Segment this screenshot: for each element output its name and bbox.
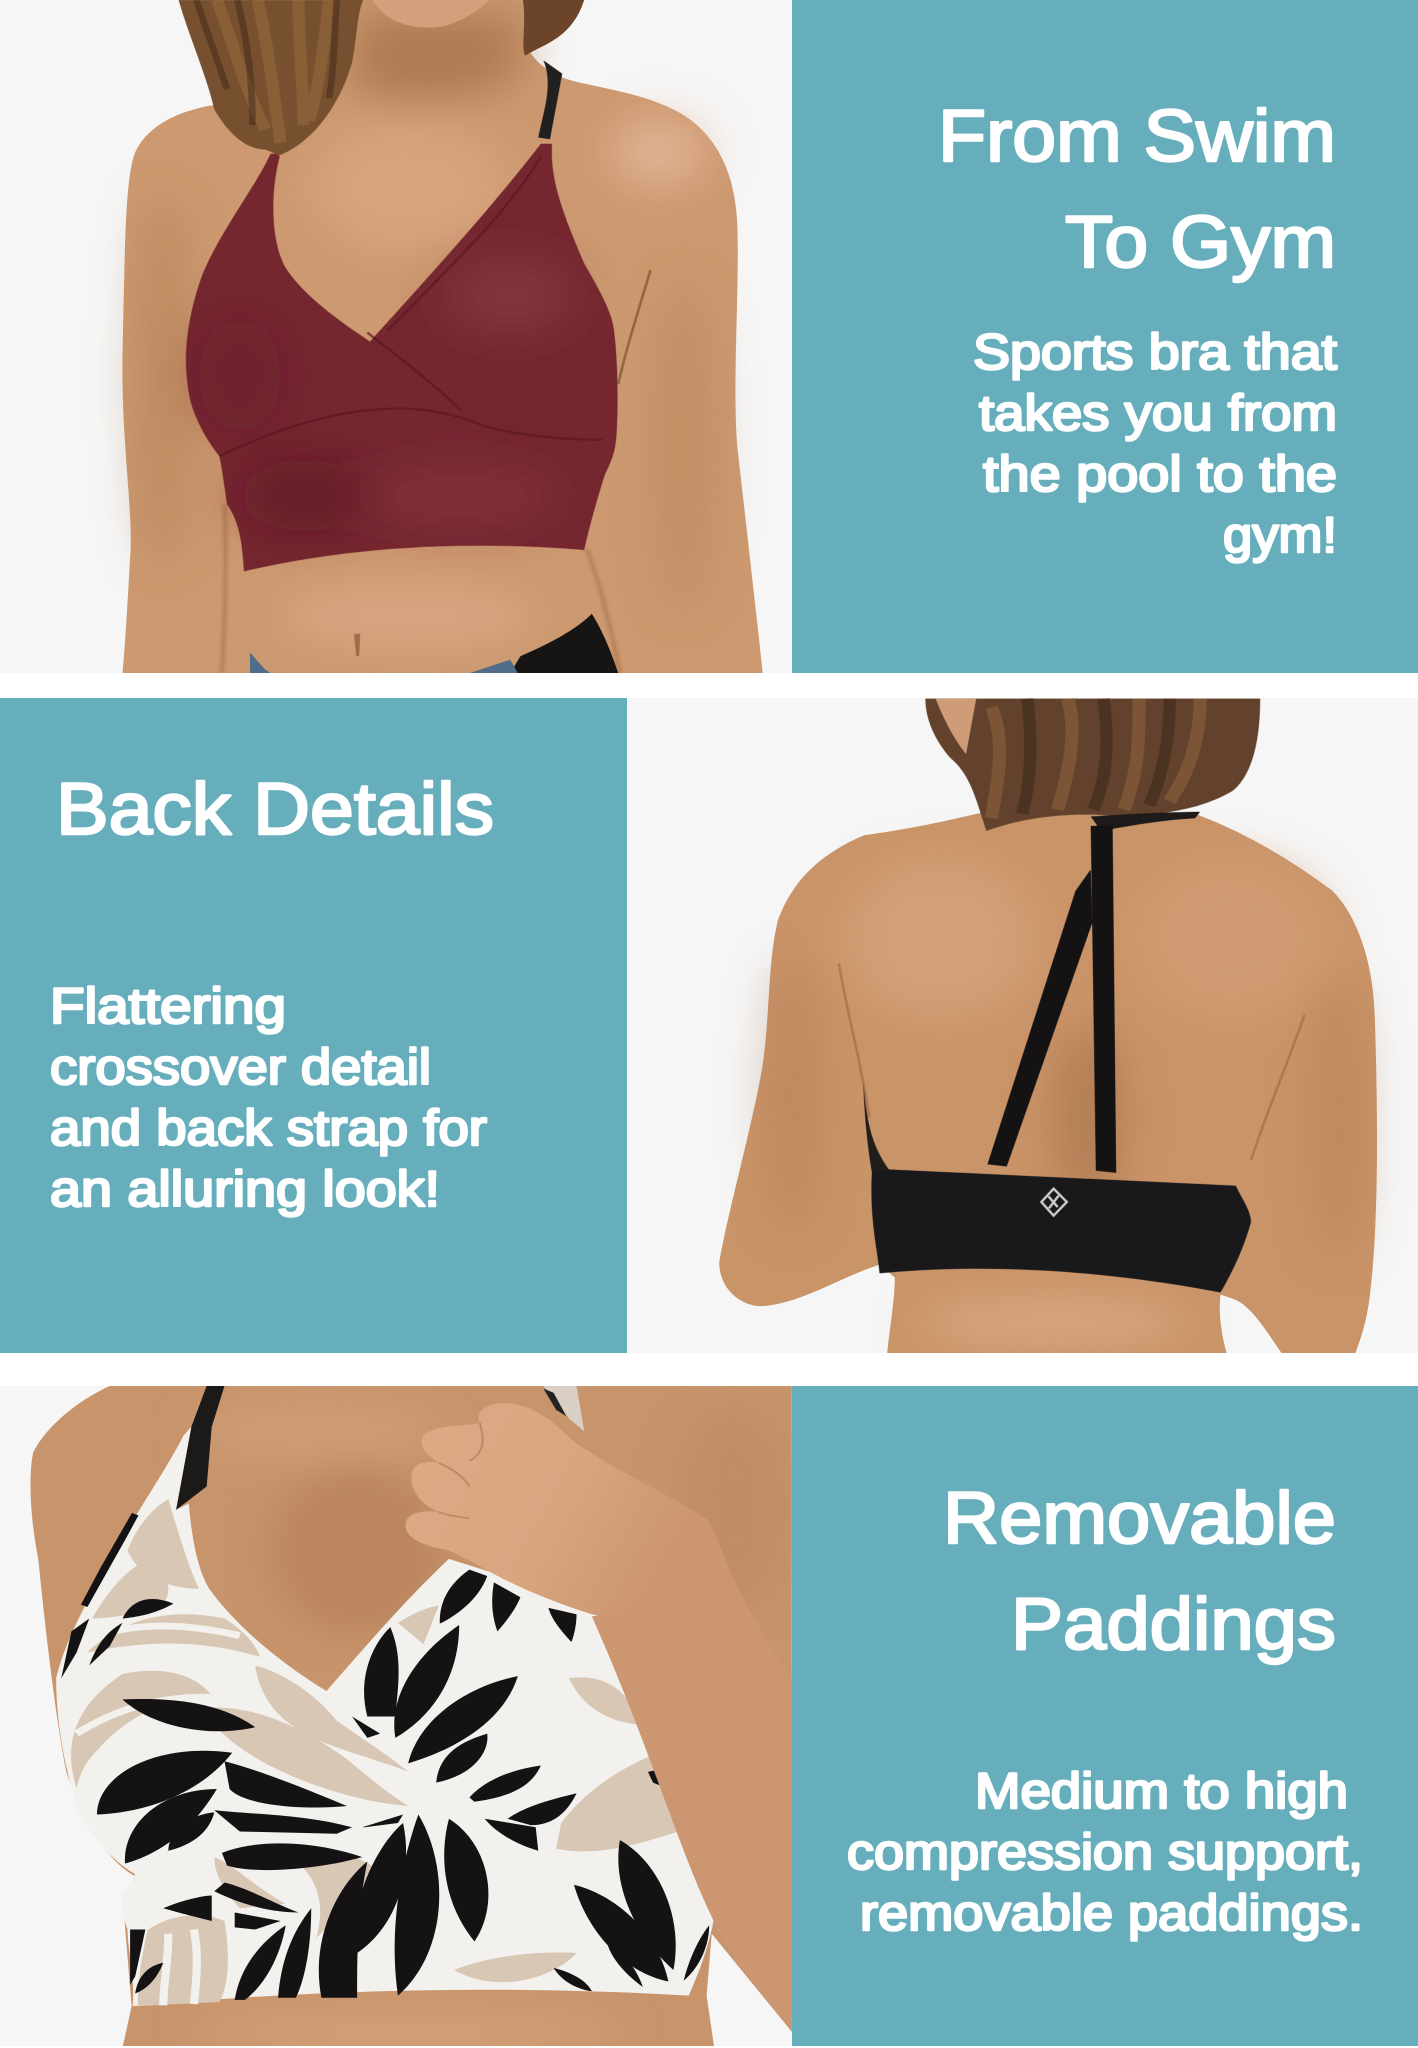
text: compression description: removable paddings.	[860, 1885, 1363, 1941]
photo: palm print sports bra front view	[0, 1386, 792, 2048]
white leaf veins	[77, 1626, 240, 2005]
text: compression description: compression support,	[847, 1824, 1363, 1880]
shorts	[510, 614, 618, 673]
text: crossover description: an alluring look!	[50, 1161, 440, 1217]
heading: removable paddings: Removable	[943, 1478, 1336, 1559]
hand	[405, 1403, 710, 1616]
heading: from swim to gym	[938, 96, 1336, 283]
black leaves	[61, 1514, 709, 2000]
arm and torso shadow lines	[222, 504, 620, 673]
diagonal strap	[987, 869, 1092, 1166]
patterned bra base	[56, 1427, 714, 2006]
model back skin	[719, 812, 1377, 1353]
panel: back details	[0, 698, 627, 1353]
text: crossover description	[50, 978, 487, 1217]
black back strap	[538, 60, 562, 139]
hair left	[179, 0, 363, 155]
forearm	[592, 1525, 792, 2032]
navel	[354, 634, 360, 656]
text: sports bra description: Sports bra that	[973, 324, 1337, 380]
photo: black sports bra back view	[627, 698, 1418, 1353]
model skin	[31, 1386, 792, 2048]
black strap	[176, 1386, 224, 1510]
panel: from swim to gym	[792, 0, 1418, 673]
heading: from swim to gym: To Gym	[1065, 202, 1336, 283]
beige leaves	[71, 1499, 679, 2006]
text: compression description	[847, 1763, 1363, 1941]
text: sports bra description: the pool to the	[983, 446, 1337, 502]
photo: burgundy sports bra front view	[0, 0, 792, 673]
black band	[871, 1169, 1251, 1292]
text: crossover description: Flattering	[50, 978, 286, 1034]
text: compression description: Medium to high	[975, 1763, 1348, 1819]
text: crossover description: crossover detail	[50, 1039, 431, 1095]
panel: removable paddings	[792, 1386, 1418, 2046]
hair	[925, 699, 1260, 831]
heading: from swim to gym: From Swim	[938, 96, 1336, 177]
hair right	[523, 0, 584, 56]
model skin	[122, 0, 763, 673]
heading: removable paddings: Paddings	[1011, 1584, 1336, 1665]
text: sports bra description: takes you from	[979, 385, 1337, 441]
vertical strap	[1091, 826, 1116, 1173]
text: sports bra description: gym!	[1223, 507, 1337, 563]
bra seams	[219, 156, 602, 456]
heading: removable paddings	[943, 1478, 1336, 1665]
icon: diamond logo	[1041, 1189, 1067, 1216]
burgundy bra	[186, 144, 618, 571]
text: crossover description: and back strap for	[50, 1100, 487, 1156]
heading: back details: Back Details	[56, 769, 494, 850]
neck strap	[1091, 812, 1200, 831]
text: sports bra description	[973, 324, 1337, 563]
